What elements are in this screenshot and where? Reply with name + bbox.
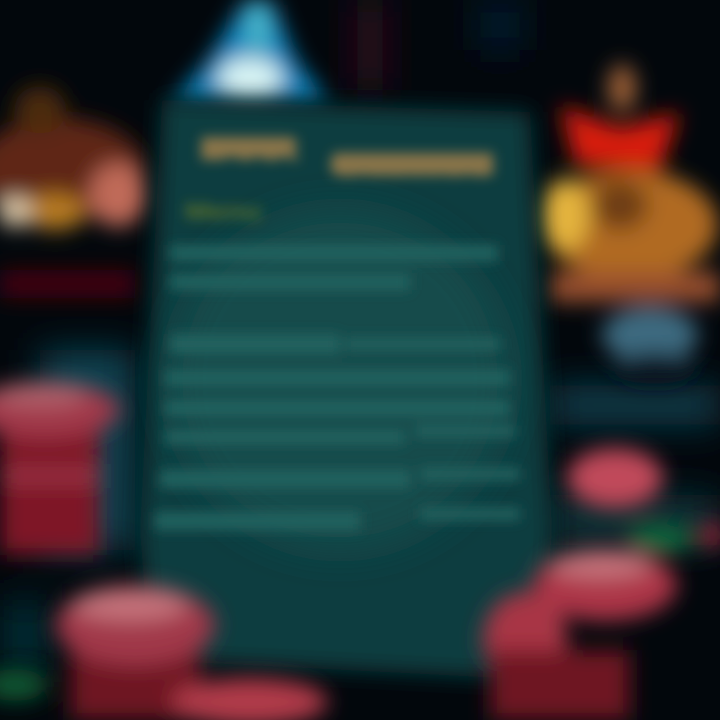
body text lines	[155, 245, 520, 530]
left food pile	[0, 86, 146, 298]
heading: Games	[328, 147, 496, 183]
subheading: Menu	[185, 199, 261, 224]
casino chips left	[0, 382, 328, 720]
heading: Best	[198, 131, 301, 167]
heading	[198, 131, 496, 183]
casino chips right	[483, 448, 720, 720]
right food pile	[541, 64, 720, 384]
panel: menu board	[140, 100, 552, 680]
lamp light	[172, 0, 328, 102]
panel highlight	[170, 210, 510, 550]
